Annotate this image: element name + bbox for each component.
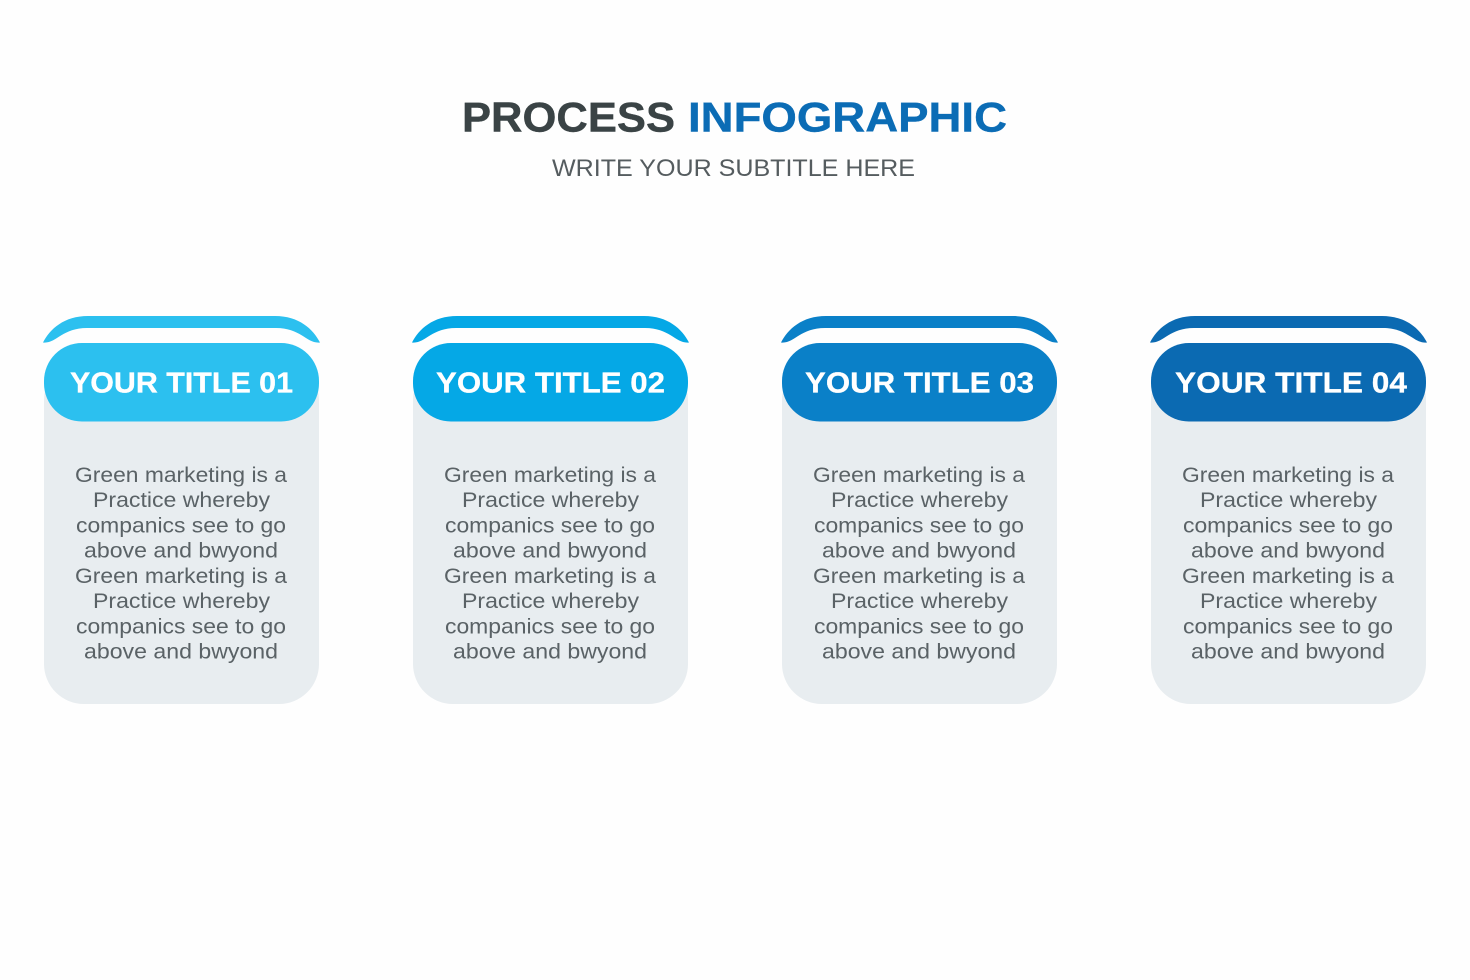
- body text: companics see to go: [814, 616, 1024, 638]
- card background: [782, 360, 1057, 704]
- body text: Practice whereby: [93, 590, 271, 613]
- body text: companics see to go: [76, 616, 286, 638]
- body text: companics see to go: [1183, 616, 1393, 638]
- body text: Green marketing is a: [1182, 565, 1394, 588]
- body text: Practice whereby: [462, 489, 640, 512]
- body text: above and bwyond: [822, 640, 1016, 664]
- body text: Green marketing is a: [75, 565, 287, 588]
- body text: above and bwyond: [84, 540, 278, 562]
- card background: [413, 360, 688, 704]
- title pill: [44, 343, 319, 422]
- body text: Green marketing is a: [813, 464, 1025, 487]
- body text: above and bwyond: [1191, 640, 1385, 664]
- arc accent: [781, 316, 1058, 343]
- pill title: YOUR TITLE 01: [70, 368, 293, 400]
- title pill: [782, 343, 1057, 422]
- body text: Practice whereby: [1200, 590, 1378, 613]
- body text: Green marketing is a: [813, 565, 1025, 588]
- title pill: [1151, 343, 1426, 422]
- arc accent: [43, 316, 320, 343]
- body text: Green marketing is a: [1182, 464, 1394, 487]
- arc accent: [412, 316, 689, 343]
- panel: step 02: [412, 316, 689, 704]
- card background: [44, 360, 319, 704]
- title: [462, 94, 1007, 140]
- title: INFOGRAPHIC: [688, 94, 1007, 140]
- title: PROCESS: [462, 94, 675, 140]
- card background: [1151, 360, 1426, 704]
- body text: above and bwyond: [453, 540, 647, 562]
- pill title: YOUR TITLE 04: [1175, 368, 1407, 400]
- body text: [1182, 464, 1394, 664]
- title pill: [413, 343, 688, 422]
- panel: step 01: [43, 316, 320, 704]
- body text: Green marketing is a: [75, 464, 287, 487]
- body text: Practice whereby: [93, 489, 271, 512]
- body text: [444, 464, 656, 664]
- body text: [75, 464, 287, 664]
- body text: companics see to go: [445, 514, 655, 538]
- body text: above and bwyond: [453, 640, 647, 664]
- body text: companics see to go: [76, 514, 286, 538]
- body text: Practice whereby: [462, 590, 640, 613]
- panel: step 03: [781, 316, 1058, 704]
- body text: companics see to go: [445, 616, 655, 638]
- body text: above and bwyond: [1191, 540, 1385, 562]
- pill title: YOUR TITLE 03: [805, 368, 1034, 400]
- body text: Green marketing is a: [444, 464, 656, 487]
- body text: companics see to go: [814, 514, 1024, 538]
- panel: step 04: [1150, 316, 1427, 704]
- subtitle: WRITE YOUR SUBTITLE HERE: [552, 155, 915, 182]
- body text: Practice whereby: [831, 590, 1009, 613]
- body text: above and bwyond: [84, 640, 278, 664]
- pill title: YOUR TITLE 02: [436, 368, 665, 400]
- body text: Practice whereby: [831, 489, 1009, 512]
- body text: companics see to go: [1183, 514, 1393, 538]
- arc accent: [1150, 316, 1427, 343]
- body text: above and bwyond: [822, 540, 1016, 562]
- body text: Green marketing is a: [444, 565, 656, 588]
- body text: [813, 464, 1025, 664]
- body text: Practice whereby: [1200, 489, 1378, 512]
